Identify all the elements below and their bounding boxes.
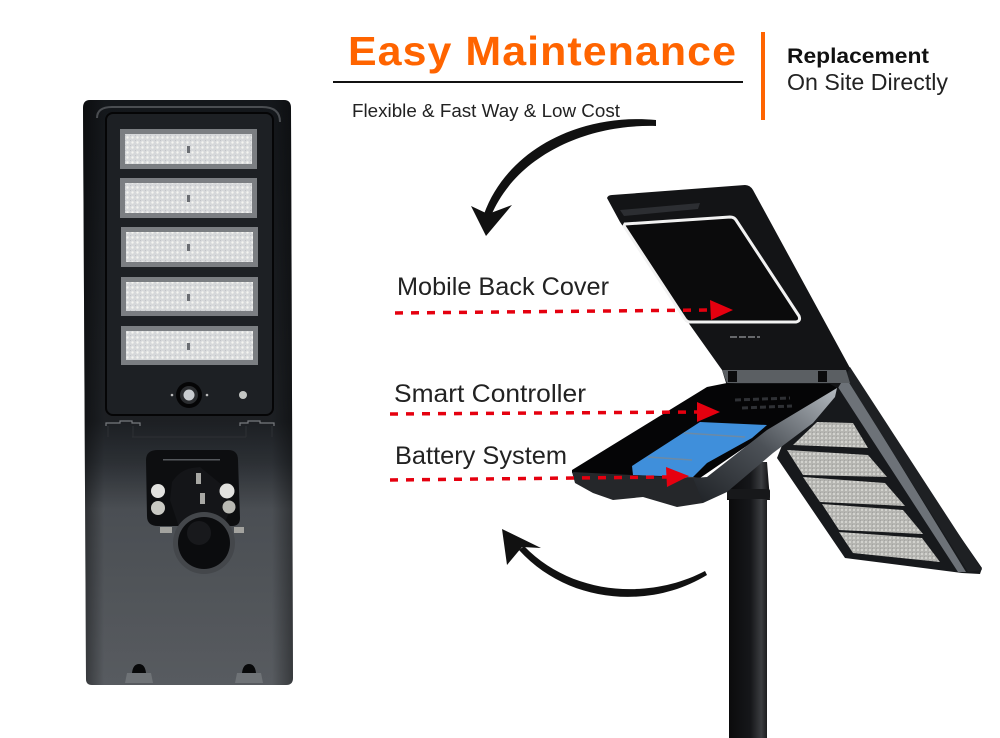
orange divider bbox=[761, 32, 765, 120]
curved arrow: top bbox=[471, 119, 656, 236]
label: mobile back cover: Mobile Back Cover bbox=[397, 273, 609, 301]
mounting bracket bbox=[146, 450, 244, 545]
LED module 3 bbox=[121, 227, 258, 267]
lamp body bbox=[83, 100, 293, 685]
controller box bbox=[572, 383, 837, 478]
bottom notches and tabs bbox=[125, 664, 263, 683]
motion sensor bbox=[171, 382, 208, 408]
controller lid handle bbox=[687, 388, 837, 503]
battery pack bbox=[632, 422, 767, 477]
title underline bbox=[333, 81, 743, 83]
on site directly text: On Site Directly bbox=[787, 69, 949, 95]
LED housing bbox=[777, 367, 982, 574]
street light front view bbox=[83, 100, 293, 685]
pointer: battery system bbox=[390, 467, 689, 487]
street light opened view bbox=[572, 185, 982, 738]
pole bbox=[727, 462, 770, 738]
subtitle: Flexible & Fast Way & Low Cost bbox=[352, 101, 620, 121]
pointer: mobile back cover bbox=[395, 300, 733, 320]
LED module 5 bbox=[121, 326, 258, 365]
curved arrow: bottom bbox=[502, 529, 707, 597]
hinges bbox=[106, 421, 274, 437]
inner lamp frame bbox=[106, 113, 273, 415]
cover window bbox=[624, 217, 800, 322]
indicator screw bbox=[239, 391, 247, 399]
label: smart controller: Smart Controller bbox=[394, 380, 586, 408]
LED module 2 bbox=[120, 178, 257, 218]
LED module 1 bbox=[120, 129, 257, 169]
pole sleeve opening bbox=[173, 512, 235, 574]
mobile back cover bbox=[607, 185, 850, 388]
controller front latch bbox=[572, 472, 703, 507]
pointer: smart controller bbox=[390, 402, 720, 422]
title: Easy Maintenance bbox=[348, 28, 737, 74]
label: battery system: Battery System bbox=[395, 442, 567, 470]
LED module 4 bbox=[121, 277, 258, 316]
LED modules bbox=[787, 422, 940, 562]
replacement text: Replacement bbox=[787, 45, 929, 68]
